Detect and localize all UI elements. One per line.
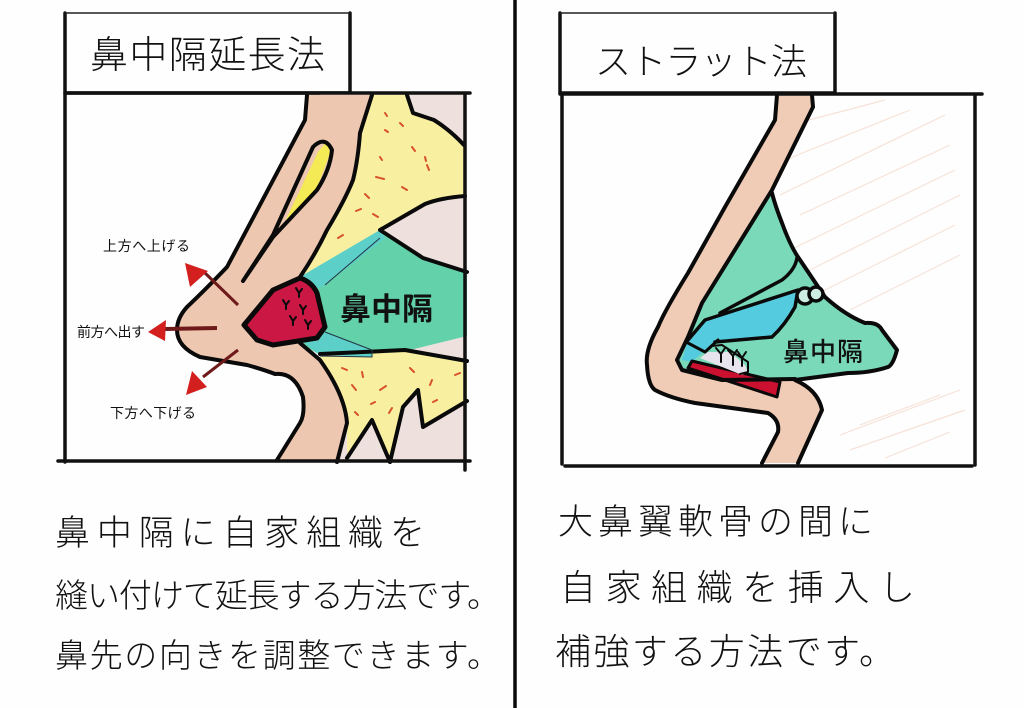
label: raise upward: 上方へ上げる	[103, 238, 190, 254]
tissue: skin	[647, 95, 822, 463]
text block: septal extension description: 鼻中隔に自家組織を	[55, 514, 425, 553]
graft: red strut	[688, 361, 780, 397]
diagram: nose cross-section with strut graft	[560, 94, 982, 466]
diagram: nose cross-section with extended septum	[58, 93, 470, 470]
sliver: yellow implant	[280, 141, 330, 232]
text block: strut description	[555, 503, 915, 672]
tissue: skin	[177, 95, 372, 462]
text block: septal extension description: 鼻先の向きを調整できます。	[55, 637, 500, 674]
arrow: forward	[148, 320, 217, 341]
arrow: downward	[186, 350, 238, 395]
heading: strut: ストラット法	[595, 41, 807, 82]
graft: red strawberry tissue	[244, 278, 325, 345]
label: push forward: 前方へ出す	[77, 324, 145, 340]
flecks in fat	[338, 113, 460, 415]
panel: septal extension method	[55, 13, 500, 674]
text block: septal extension description: 縫い付けて延長する方法です。	[55, 577, 500, 614]
text block: strut description: 自家組織を挿入し	[560, 567, 915, 608]
septum: light blue edges	[300, 230, 385, 357]
hatching: pale background tissue	[780, 100, 965, 458]
sliver outline	[243, 142, 332, 281]
frame	[560, 94, 982, 466]
cartilage: blue lower lateral	[682, 290, 798, 362]
label: septum: 鼻中隔	[783, 337, 863, 367]
heading: septal extension	[65, 13, 350, 93]
stitched cartilage tip	[688, 340, 748, 375]
text block: strut description: 大鼻翼軟骨の間に	[558, 503, 873, 542]
tissue: grey-pink background	[320, 94, 466, 461]
text block: strut description: 補強する方法です。	[555, 631, 895, 672]
panel: strut method	[555, 13, 982, 672]
heading: strut	[560, 13, 835, 93]
septum: teal cartilage	[300, 230, 467, 355]
heading: septal extension: 鼻中隔延長法	[90, 35, 325, 77]
frame	[58, 93, 470, 470]
arrow: upward	[185, 263, 238, 305]
stitches on graft	[283, 288, 311, 329]
tissue: upper yellow fat	[300, 95, 465, 277]
septum: teal cartilage	[677, 193, 897, 380]
label: septum: 鼻中隔	[340, 292, 433, 327]
knots	[797, 287, 823, 304]
text block: septal extension description	[55, 514, 500, 674]
label: lower downward: 下方へ下げる	[110, 405, 196, 421]
tissue: lower yellow fat	[320, 350, 467, 460]
